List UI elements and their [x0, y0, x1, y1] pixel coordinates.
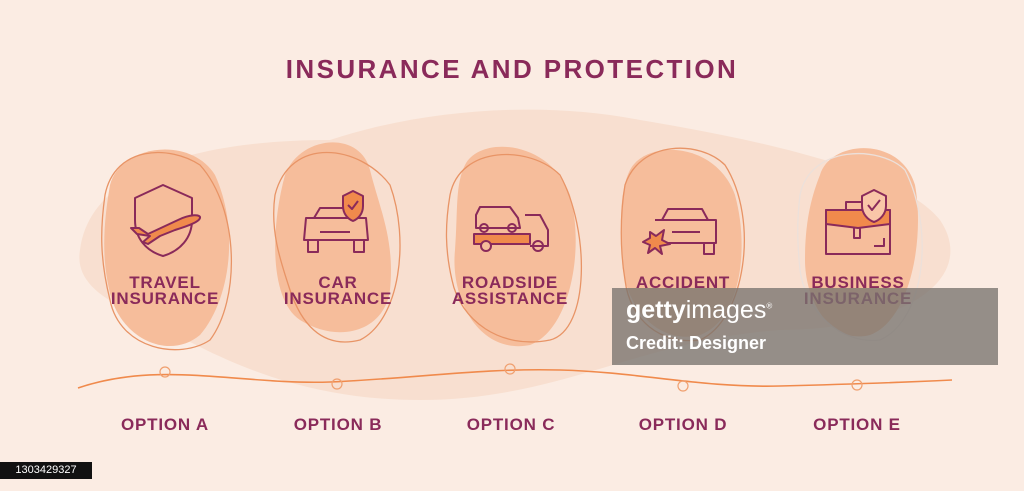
- label: business insurance: [804, 273, 912, 308]
- label: car insurance: INSURANCE: [284, 289, 392, 308]
- blob E: [805, 148, 918, 336]
- title: INSURANCE AND PROTECTION: [286, 54, 738, 84]
- watermark: [612, 288, 998, 365]
- label: travel insurance: [111, 273, 219, 308]
- icon: travel shield: [131, 185, 200, 256]
- text: OPTION C: [467, 415, 555, 434]
- id tag: [0, 462, 92, 479]
- label: business insurance: BUSINESS: [811, 273, 905, 292]
- label: business insurance: INSURANCE: [804, 289, 912, 308]
- options: OPTION A: [121, 415, 209, 434]
- label: accident: ACCIDENT: [636, 273, 730, 292]
- icon: tow truck: [474, 207, 548, 251]
- text: OPTION B: [294, 415, 382, 434]
- timeline: [78, 370, 952, 388]
- blob D: [621, 150, 742, 337]
- label: roadside assistance: ASSISTANCE: [452, 289, 568, 308]
- text: OPTION E: [813, 415, 901, 434]
- watermark: Credit: Designer: [626, 333, 766, 353]
- icon: accident car: [643, 209, 716, 254]
- watermark: gettyimages®: [626, 296, 772, 324]
- label: roadside assistance: ROADSIDE: [462, 273, 558, 292]
- blob B: [275, 142, 391, 332]
- label: travel insurance: INSURANCE: [111, 289, 219, 308]
- text: OPTION D: [639, 415, 727, 434]
- label: car insurance: CAR: [318, 273, 358, 292]
- icon: briefcase shield: [826, 190, 890, 254]
- label: roadside assistance: [452, 273, 568, 308]
- icon: car shield: [304, 191, 368, 252]
- blob C: [454, 147, 576, 346]
- blob A: [104, 150, 229, 346]
- label: travel insurance: TRAVEL: [129, 273, 201, 292]
- label: car insurance: [284, 273, 392, 308]
- id tag: 1303429327: [15, 464, 77, 476]
